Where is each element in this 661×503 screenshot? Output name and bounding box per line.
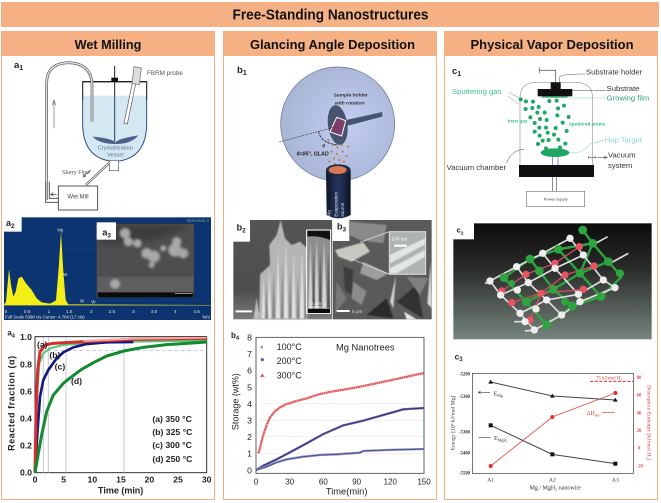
diagram: sputtering chamber: Vacuum chamber — [447, 163, 507, 172]
label b1: 1 — [243, 70, 247, 77]
photo: SEM b3 nanosheets: 3 — [342, 227, 346, 234]
chart: energy and desorption enthalpy c3: E — [494, 435, 498, 442]
chart: reacted fraction a4: (c) 300 °C — [152, 440, 193, 450]
chart: Mg nanotrees storage b4: 90 — [352, 477, 362, 486]
chart: Mg nanotrees storage b4: b — [231, 331, 236, 340]
label a2: a — [6, 218, 11, 228]
diagram: sputtering chamber: Growing film — [607, 94, 649, 103]
chart: reacted fraction a4: (b) — [49, 350, 61, 360]
chart: energy and desorption enthalpy c3: 60 — [637, 394, 642, 399]
diagram: sputtering chamber: Hap Target — [605, 136, 643, 145]
chart: Mg nanotrees storage b4: 60 — [319, 477, 328, 486]
chart: energy and desorption enthalpy c3: Energy [10³ kJ/mol Mg] — [450, 395, 456, 450]
heading: physical vapor deposition: Physical Vapor Deposition — [470, 38, 634, 52]
diagram: wet mill crystallization loop: Slurry Flow — [62, 170, 91, 176]
diagram: GLAD chamber: Sample holder — [333, 93, 369, 99]
label c1: 1 — [457, 71, 461, 78]
chart: Mg nanotrees storage b4: 150 — [417, 477, 431, 486]
chart: Mg nanotrees storage b4: 0 — [254, 477, 259, 486]
photo: SEM b2 nanotrees: 5 μm — [311, 301, 321, 306]
chart: reacted fraction a4: (d) — [71, 376, 82, 386]
chart: EDS spectrum: 2.5 — [109, 309, 116, 314]
heading: wet milling — [1, 31, 215, 56]
chart: EDS spectrum: W — [63, 272, 68, 277]
chart: energy and desorption enthalpy c3: A2 — [549, 477, 556, 483]
chart: Mg nanotrees storage b4: 120 — [384, 477, 398, 486]
diagram: sputtering chamber — [447, 67, 649, 207]
chart: EDS spectrum: 0.5 — [24, 309, 31, 314]
label a1: 1 — [19, 65, 23, 72]
chart: energy and desorption enthalpy c3: c — [455, 351, 459, 361]
chart: reacted fraction a4: (a) 350 °C — [152, 414, 193, 424]
chart: EDS spectrum: keV — [203, 315, 210, 320]
photo: SEM b2 nanotrees: 2 μm — [255, 311, 265, 316]
chart: reacted fraction a4: 30 — [202, 475, 212, 485]
chart: EDS spectrum: 3 — [132, 309, 135, 314]
diagram: GLAD chamber: source — [340, 202, 345, 217]
chart: EDS spectrum: W — [80, 298, 85, 303]
chart: energy and desorption enthalpy c3: A3 — [612, 477, 619, 483]
chart: reacted fraction a4: 0.4 — [20, 414, 32, 424]
chart: reacted fraction a4: 0.8 — [20, 359, 32, 369]
chart: reacted fraction a4: (c) — [55, 361, 65, 371]
diagram: sputtering chamber: Vacuum — [608, 151, 636, 160]
heading: physical vapor deposition — [444, 31, 658, 56]
diagram: wet mill crystallization loop — [46, 63, 183, 210]
diagram: wet mill crystallization loop: FBRM probe — [147, 70, 183, 77]
label a2: 2 — [11, 223, 15, 230]
chart: energy and desorption enthalpy c3: 75 kJ/mol H₂ — [596, 376, 623, 381]
chart: EDS spectrum: 4.5 — [193, 309, 200, 314]
photo: SEM b3 nanosheets: b — [337, 222, 342, 232]
chart: energy and desorption enthalpy c3: E — [493, 391, 497, 398]
chart: energy and desorption enthalpy c3: 20 — [637, 429, 642, 434]
chart: energy and desorption enthalpy c3: Mg — [497, 393, 503, 398]
chart: energy and desorption enthalpy c3: 80 — [637, 376, 642, 381]
chart: reacted fraction a4: 25 — [173, 475, 183, 485]
image: atomic lattice c2: 2 — [461, 230, 464, 236]
chart: EDS spectrum: 0 — [5, 309, 8, 314]
chart: energy and desorption enthalpy c3: -5300 — [459, 430, 471, 435]
diagram: sputtering chamber: Sputtered atoms — [569, 121, 606, 126]
photo: SEM b2 nanotrees — [232, 218, 332, 319]
chart: EDS spectrum: 4 — [174, 309, 177, 314]
heading: glancing angle deposition: Glancing Angle Deposition — [250, 38, 415, 52]
photo: SEM b2 nanotrees: 2 — [242, 227, 246, 234]
chart: EDS spectrum: 2 — [90, 309, 93, 314]
chart: reacted fraction a4 — [7, 329, 212, 496]
chart: energy and desorption enthalpy c3: des — [595, 413, 600, 417]
chart: reacted fraction a4: Time (min) — [98, 486, 143, 496]
diagram: sputtering chamber: Inert gas — [508, 119, 528, 124]
chart: EDS spectrum: 1 — [48, 309, 51, 314]
diagram: sputtering chamber: Sputtering gas — [452, 87, 502, 96]
diagram: wet mill crystallization loop: Vessel — [107, 153, 124, 159]
chart: Mg nanotrees storage b4: 300°C — [277, 371, 302, 381]
label a3: 3 — [107, 233, 111, 240]
chart: Mg nanotrees storage b4: 2 — [247, 432, 252, 442]
diagram: wet mill crystallization loop: Wet Mill — [67, 194, 89, 200]
image: atomic lattice c2 — [453, 223, 652, 339]
chart: reacted fraction a4: 10 — [88, 475, 97, 485]
chart: energy and desorption enthalpy c3: 3 — [459, 357, 463, 363]
chart: Mg nanotrees storage b4 — [231, 331, 431, 496]
chart: Mg nanotrees storage b4: 4 — [236, 336, 240, 342]
diagram: GLAD chamber: Mg — [327, 210, 332, 217]
diagram: sputtering chamber: Power supply — [544, 197, 568, 202]
diagram: GLAD chamber: Evaporation — [333, 191, 338, 217]
photo: SEM b3 nanosheets: 200 nm — [392, 236, 407, 241]
heading: wet milling: Wet Milling — [75, 38, 141, 52]
panel: physical vapor deposition — [444, 31, 658, 500]
chart: energy and desorption enthalpy c3: -20 — [637, 464, 644, 469]
chart: EDS spectrum — [3, 216, 211, 320]
diagram: wet mill crystallization loop: Crystallization — [98, 145, 133, 151]
chart: reacted fraction a4: 0.0 — [20, 468, 32, 478]
chart: reacted fraction a4: 0.2 — [20, 441, 32, 451]
diagram: GLAD chamber: θ — [322, 143, 325, 149]
chart: Mg nanotrees storage b4: Storage (wt%) — [231, 373, 241, 430]
chart: EDS spectrum: Mg — [57, 228, 64, 233]
chart: reacted fraction a4: 20 — [145, 475, 154, 485]
chart: Mg nanotrees storage b4: 200°C — [277, 356, 302, 366]
chart: reacted fraction a4: (d) 250 °C — [152, 454, 193, 464]
chart: energy and desorption enthalpy c3: Desorption Enthalpy [kJ/mol H₂] — [645, 385, 651, 460]
chart: Mg nanotrees storage b4: 100°C — [277, 342, 302, 352]
diagram: sputtering chamber: Substrate holder — [586, 67, 643, 76]
chart: EDS spectrum: W — [91, 300, 96, 305]
chart: energy and desorption enthalpy c3: 0 — [638, 447, 641, 452]
title banner: Free-Standing Nanostructures — [232, 8, 428, 24]
chart: Mg nanotrees storage b4: 3 — [247, 416, 252, 426]
chart: reacted fraction a4: (a) — [37, 339, 48, 349]
chart: reacted fraction a4: Reacted fraction (α) — [7, 356, 17, 451]
heading: glancing angle deposition — [223, 31, 437, 56]
chart: energy and desorption enthalpy c3: -5300 — [459, 395, 471, 400]
photo: SEM b2 nanotrees: b — [237, 222, 242, 232]
chart: reacted fraction a4: 15 — [116, 475, 126, 485]
chart: EDS spectrum: Spectrum 4 — [187, 218, 209, 223]
chart: reacted fraction a4: 1.0 — [20, 332, 32, 342]
chart: reacted fraction a4: a — [7, 329, 12, 338]
label a2 — [3, 216, 22, 232]
panel: wet milling — [1, 31, 215, 500]
diagram: GLAD chamber — [279, 67, 395, 218]
chart: energy and desorption enthalpy c3: -5200 — [459, 372, 471, 377]
chart: Mg nanotrees storage b4: 0 — [247, 465, 252, 475]
label c1: c — [452, 66, 457, 77]
chart: EDS spectrum: Full Scale 6398 cts Cursor: 4.784 (17 cts) — [5, 315, 85, 320]
chart: reacted fraction a4: (b) 325 °C — [152, 427, 193, 437]
chart: EDS spectrum: 3.5 — [151, 309, 158, 314]
diagram: GLAD chamber: with rotation — [335, 100, 365, 106]
chart: reacted fraction a4: 0 — [33, 475, 38, 485]
label b1: b — [237, 65, 243, 76]
image: atomic lattice c2: c — [457, 226, 461, 235]
chart: energy and desorption enthalpy c3 — [450, 351, 651, 492]
chart: Mg nanotrees storage b4: Mg Nanotrees — [336, 343, 395, 353]
panel: glancing angle deposition — [223, 31, 437, 500]
photo: SEM b3 nanosheets — [333, 219, 432, 319]
chart: Mg nanotrees storage b4: 5 — [247, 382, 252, 392]
chart: reacted fraction a4: 4 — [12, 333, 16, 339]
chart: energy and desorption enthalpy c3: 40 — [637, 411, 642, 416]
diagram: GLAD chamber: θ=85°, GLAD — [297, 151, 329, 157]
label a1: a — [14, 60, 19, 71]
chart: Mg nanotrees storage b4: 7 — [247, 349, 252, 359]
chart: reacted fraction a4: 5 — [61, 475, 66, 485]
chart: reacted fraction a4: 0.6 — [20, 386, 32, 396]
chart: energy and desorption enthalpy c3: Mg / MgH₂ nanowire — [530, 486, 581, 492]
chart: Mg nanotrees storage b4: 30 — [285, 477, 295, 486]
diagram: sputtering chamber: Substrate — [607, 84, 639, 93]
diagram: sputtering chamber: system — [608, 161, 632, 170]
chart: energy and desorption enthalpy c3: MgH₂ — [498, 437, 508, 442]
chart: energy and desorption enthalpy c3: -5400 — [459, 452, 471, 457]
chart: EDS spectrum: 1.5 — [66, 309, 73, 314]
photo: SEM inset a3 — [97, 222, 194, 298]
chart: Mg nanotrees storage b4: × — [260, 345, 264, 351]
photo: SEM b3 nanosheets: 5 μm — [352, 309, 363, 314]
chart: Mg nanotrees storage b4: 8 — [247, 332, 252, 342]
chart: Mg nanotrees storage b4: Time(min) — [326, 486, 367, 496]
chart: energy and desorption enthalpy c3: A1 — [487, 477, 494, 483]
chart: energy and desorption enthalpy c3: ΔH — [587, 411, 595, 417]
chart: Mg nanotrees storage b4: 6 — [247, 366, 252, 376]
title banner — [1, 2, 659, 27]
label a3: a — [102, 228, 107, 238]
chart: energy and desorption enthalpy c3: -5500 — [459, 472, 471, 477]
chart: Mg nanotrees storage b4: 4 — [247, 399, 252, 409]
chart: Mg nanotrees storage b4: 1 — [247, 449, 252, 459]
